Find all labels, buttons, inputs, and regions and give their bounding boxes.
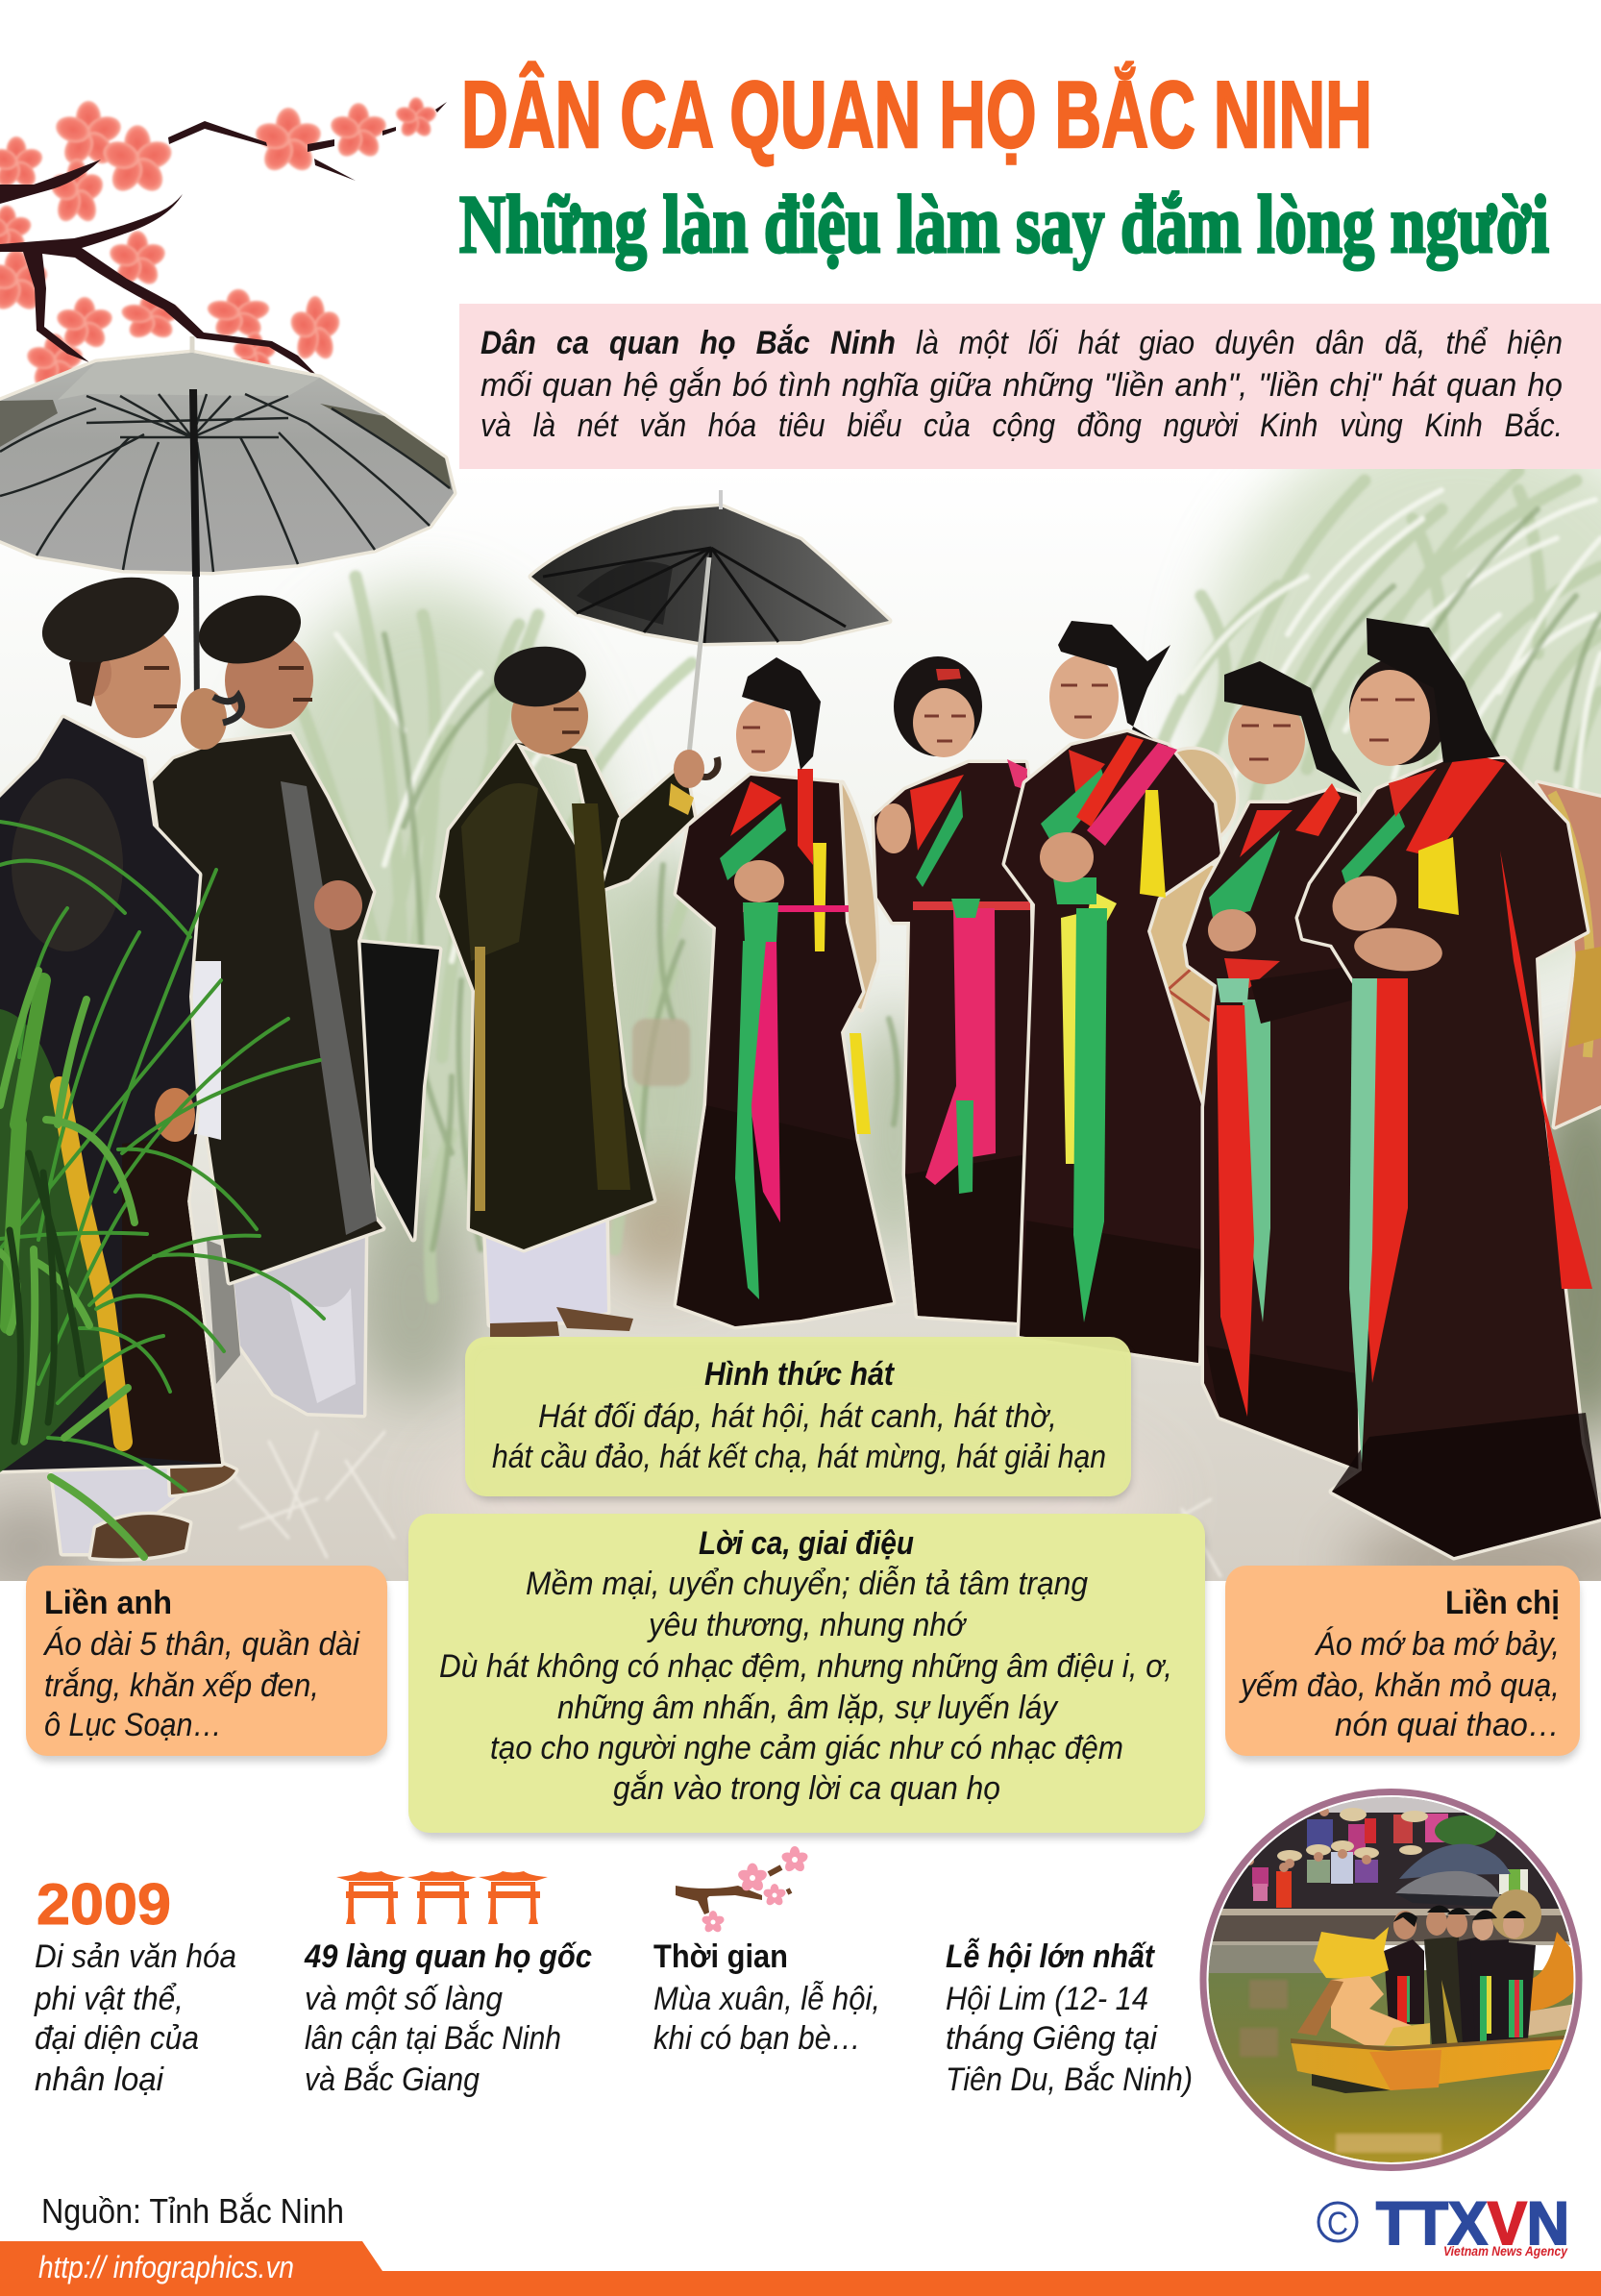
figure: man 3 (holding umbrella) [439, 642, 704, 1338]
head scarf [742, 657, 821, 770]
panel: liền anh [26, 1566, 387, 1762]
red bib [910, 775, 964, 851]
fact: lễ hội lớn nhất: Tiên Du, Bắc Ninh) [946, 2061, 1193, 2098]
right dragon [1530, 1932, 1574, 2011]
text: Dù hát không có nhạc đệm, nhưng những âm điệu i, ơ, [439, 1648, 1172, 1685]
text [34, 1938, 236, 2098]
fact: lễ hội lớn nhất: Hội Lim (12- 14 [946, 1981, 1148, 2017]
hair [1349, 657, 1449, 765]
text: lân cận tại Bắc Ninh [305, 2020, 561, 2057]
boat [1291, 2037, 1564, 2090]
dress [1186, 790, 1362, 1470]
panel: liền chị [1225, 1566, 1580, 1762]
wide blades [8, 980, 43, 1326]
red bib [1240, 810, 1293, 857]
green sash [1041, 769, 1107, 851]
text: nón quai thao… [1335, 1707, 1560, 1743]
straw on the ground [221, 1432, 1220, 1576]
red side sash [1500, 851, 1592, 1289]
blossoms [0, 97, 438, 392]
conical hat [1121, 750, 1286, 1115]
dragon prow [1314, 1927, 1389, 1980]
panel: hình thức hát [465, 1337, 1131, 1500]
figure: singer 4 [1186, 661, 1362, 1470]
year: 2009 [37, 1872, 171, 1937]
green sash [1342, 810, 1405, 889]
face [913, 688, 974, 757]
intro text [480, 325, 1563, 444]
fact: lễ hội lớn nhất: Lễ hội lớn nhất [946, 1938, 1155, 1975]
crowd [1222, 1797, 1561, 1911]
red scarf [1217, 1005, 1254, 1417]
text: phi vật thể, [34, 1981, 184, 2017]
hands [1325, 868, 1404, 939]
thin blades [0, 822, 324, 1491]
lower hand [155, 1088, 195, 1142]
url: http:// infographics.vn [38, 2250, 294, 2284]
dress [677, 776, 893, 1326]
grey undershirt strip [207, 1240, 240, 1384]
pink scarf [925, 908, 996, 1185]
green scarf [1073, 908, 1107, 1322]
background photo: misty reeds and path [0, 413, 1601, 1605]
face [92, 623, 181, 738]
performers [1384, 1905, 1536, 2047]
text: hát cầu đảo, hát kết chạ, hát mừng, hát giải hạn [492, 1439, 1106, 1475]
tassels [813, 843, 871, 1134]
text: yêu thương, nhung nhớ [647, 1607, 967, 1643]
dress [1298, 759, 1601, 1557]
hat [191, 585, 308, 674]
agency name: Vietnam News Agency [1443, 2243, 1568, 2259]
circular photo: boat performance [1192, 1788, 1601, 2182]
figure: man 2 (liền anh, back) [153, 585, 439, 1415]
face [736, 699, 792, 772]
text: Di sản văn hóa [35, 1938, 236, 1975]
sandals [490, 1307, 633, 1338]
conical hat [1491, 1889, 1541, 1939]
white trousers [231, 1221, 365, 1415]
fact: 49 làng [304, 1871, 592, 2098]
water [1209, 1970, 1574, 2162]
text: Thời gian [653, 1938, 788, 1975]
white trousers [485, 1197, 607, 1324]
head scarf [1224, 661, 1362, 793]
yellow tassel [1418, 837, 1459, 915]
face [1049, 654, 1119, 739]
hand [314, 880, 362, 930]
hands [1040, 832, 1094, 882]
panel: introduction [459, 304, 1601, 469]
red bib and collar [730, 769, 813, 865]
pale reed leaves [288, 471, 1601, 1297]
hat [33, 562, 188, 678]
text: gắn vào trong lời ca quan họ [613, 1770, 1000, 1807]
figure: singer 2 [874, 656, 1033, 1322]
intro text: mối quan hệ gắn bó tình nghĩa giữa những "liền anh", "liền chị" hát quan họ [480, 367, 1563, 404]
fact: 2009 [34, 1872, 236, 2098]
plum blossom branches [0, 97, 447, 392]
hand [734, 860, 784, 902]
grass mass [0, 1009, 120, 1472]
fact: lễ hội lớn nhất [946, 1938, 1193, 2098]
text [653, 1938, 880, 2057]
dress [1005, 732, 1220, 1363]
heading: Liền anh [44, 1585, 172, 1621]
darker reed leaves [384, 509, 1601, 1249]
face [1228, 696, 1305, 784]
figure: singer 1 [677, 657, 893, 1326]
robe [439, 743, 689, 1249]
folded umbrella [342, 941, 439, 1239]
scarves [751, 937, 780, 1222]
text: và Bắc Giang [305, 2061, 480, 2098]
red bib [1069, 750, 1105, 798]
hand on umbrella [181, 688, 227, 750]
umbrellas [1399, 1844, 1511, 1879]
text: Mùa xuân, lễ hội, [653, 1981, 880, 2017]
text: Mềm mại, uyển chuyển; diễn tả tâm trạng [526, 1566, 1088, 1602]
source: Nguồn: Tỉnh Bắc Ninh [41, 2191, 344, 2231]
icon: three gates [336, 1871, 548, 1924]
belt [743, 905, 849, 912]
trousers [48, 1438, 180, 1553]
panel: lời ca, giai điệu [408, 1514, 1205, 1839]
fact: thời gian [653, 1846, 880, 2057]
face [1349, 670, 1430, 766]
text: trắng, khăn xếp đen, [44, 1667, 319, 1704]
hand [1208, 909, 1256, 951]
icon: blossom branch [676, 1846, 809, 1934]
green sash [916, 790, 963, 887]
face [511, 678, 588, 754]
branches [0, 102, 447, 379]
hat [491, 642, 589, 711]
heading: Hình thức hát [704, 1356, 895, 1393]
figure: singer 3 [1005, 621, 1220, 1363]
fact: lễ hội lớn nhất: tháng Giêng tại [946, 2020, 1158, 2057]
text: ô Lục Soạn… [44, 1707, 222, 1743]
text: tạo cho người nghe cảm giác như có nhạc đệm [490, 1730, 1123, 1766]
wordmark: TTXVN [1376, 2190, 1569, 2258]
heading: Lời ca, giai điệu [699, 1525, 914, 1562]
head scarf [894, 656, 982, 756]
stone wall [1220, 1909, 1563, 1915]
white sleeve patch [183, 961, 221, 1140]
text: những âm nhấn, âm lặp, sự luyến láy [557, 1690, 1059, 1726]
figure: singer 5 with drum [1298, 618, 1601, 1557]
red collar [1295, 783, 1341, 836]
white reed highlights [336, 490, 1601, 961]
umbrella: left large [0, 336, 454, 711]
head scarf [1367, 618, 1500, 763]
text: Áo mớ ba mớ bảy, [1314, 1626, 1560, 1663]
heading: Liền chị [1445, 1585, 1560, 1621]
text [1239, 1626, 1560, 1743]
drum [1538, 783, 1601, 1126]
logo: TTXVN [1318, 2190, 1569, 2259]
green scarf [1243, 1000, 1270, 1322]
text: và một số làng [305, 1981, 503, 2017]
umbrella: centre dark [531, 490, 889, 778]
green sash [720, 803, 786, 880]
knots [1224, 958, 1280, 988]
drum [842, 783, 876, 1009]
head scarf [1058, 621, 1170, 739]
sandals [91, 1515, 189, 1558]
red neck scarf [1406, 750, 1505, 857]
robe [153, 734, 382, 1282]
yellow scarf [1061, 913, 1081, 1164]
text [42, 1626, 360, 1743]
copyright mark [1318, 2203, 1357, 2242]
belt [913, 901, 1030, 910]
wrist band [669, 783, 694, 815]
text [492, 1398, 1106, 1475]
text [439, 1566, 1172, 1807]
hand [674, 750, 704, 788]
foreground grass [0, 822, 324, 1557]
yellow tassel [1140, 790, 1166, 898]
pale green scarf [1349, 978, 1377, 1464]
footer bar [0, 2241, 1601, 2296]
text: 49 làng quan họ gốc [304, 1938, 592, 1975]
pink shoulder [1007, 759, 1027, 790]
red scarf [1363, 978, 1408, 1383]
sleeve [1250, 966, 1355, 1024]
green sash [1209, 830, 1280, 918]
text [304, 1938, 592, 2098]
figure: man 1 (front left) [0, 562, 242, 1558]
pink and red shawl [1087, 743, 1177, 846]
hand [876, 803, 911, 853]
dress [874, 763, 1033, 1322]
text: đại diện của [35, 2020, 199, 2057]
text: Áo dài 5 thân, quần dài [42, 1626, 360, 1663]
red bib [1389, 769, 1437, 817]
text: Hát đối đáp, hát hội, hát canh, hát thờ, [538, 1398, 1057, 1435]
robe [0, 718, 221, 1470]
text: khi có bạn bè… [653, 2020, 861, 2057]
text: nhân loại [35, 2061, 164, 2098]
text: yếm đào, khăn mỏ quạ, [1239, 1667, 1560, 1704]
face [225, 632, 313, 728]
copyright mark: C [1327, 2206, 1348, 2242]
